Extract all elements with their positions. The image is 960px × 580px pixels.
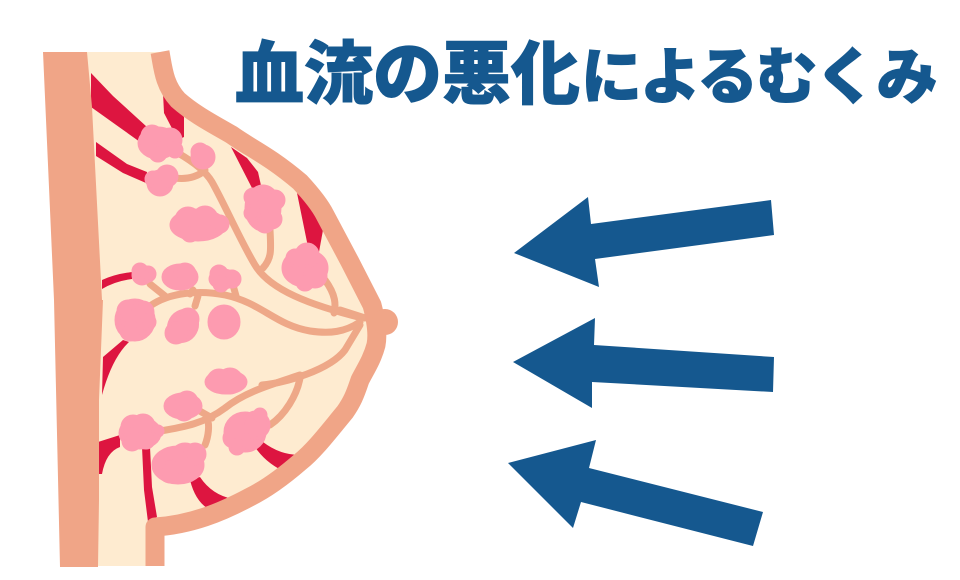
arrow: middle: [513, 318, 774, 408]
tissue: cream fill: [85, 52, 376, 566]
arrow: top: [514, 197, 774, 287]
milk ducts: [150, 153, 365, 445]
illustration: breast cross-section: [43, 52, 398, 567]
title: 血流の悪化: [235, 36, 580, 113]
lobules: [116, 126, 327, 483]
blood vessels: [91, 73, 323, 522]
title: によるむくみ: [581, 43, 936, 111]
arrows pointing toward the breast: [508, 197, 774, 546]
chest wall: [43, 52, 103, 567]
skin outline: [155, 52, 377, 566]
nipple: [372, 309, 398, 335]
arrow: bottom: [508, 440, 763, 546]
